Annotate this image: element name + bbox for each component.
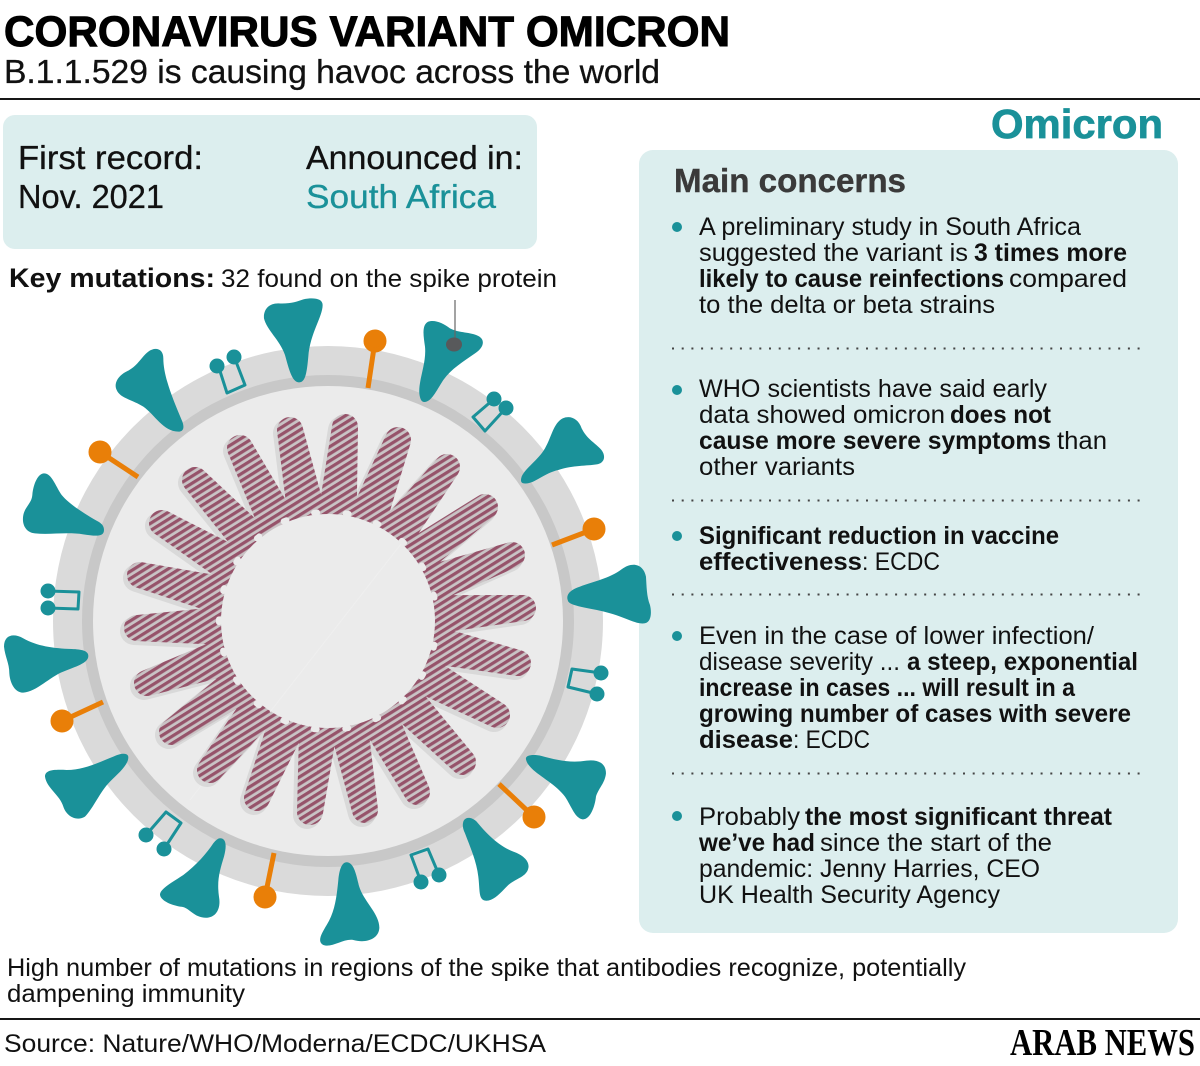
main concerns heading: Main concerns [674,162,906,199]
concern: exponential increase: : ECDC [793,726,870,754]
caption: High number of mutations in regions of the spike that antibodies recognize, potentially [7,954,967,982]
first record: First record: [18,139,203,176]
spike proteins [4,298,651,946]
subtitle: B.1.1.529 is causing havoc across the world [4,53,660,90]
source: Source: Nature/WHO/Moderna/ECDC/UKHSA [4,1030,546,1058]
central cavity [219,512,437,730]
mutation pointer [446,300,462,352]
key mutations heading: 32 found on the spike protein [221,265,557,293]
concern: significant threat: UK Health Security Agency [699,881,1000,909]
concern: reinfections: 3 times more [974,239,1127,267]
concern: vaccine effectiveness: Significant reduction in vaccine [699,522,1059,550]
concern: exponential increase: Even in the case of lower infection/ [699,622,1094,650]
concern: vaccine effectiveness [672,522,1059,576]
concern: exponential increase: growing number of cases with severe [699,700,1131,728]
concern: reinfections: likely to cause reinfections [699,265,1004,293]
concern: significant threat: pandemic: Jenny Harries, CEO [699,855,1040,883]
caption: dampening immunity [7,980,246,1008]
concern: exponential increase: increase in cases ... will result in a [699,674,1076,702]
concern: exponential increase: disease severity ... [699,648,900,676]
concern: significant threat: we’ve had [698,829,815,857]
teal membrane proteins [40,350,608,890]
concern: exponential increase [672,622,1138,754]
concern: severity: than [1057,427,1107,455]
concern: exponential increase: a steep, exponential [907,648,1138,676]
key mutations heading [9,263,557,293]
announced location: Announced in: [306,139,523,176]
announced location [306,139,523,215]
panel: first record and location [3,115,537,249]
concern: severity: does not [950,401,1052,429]
concern: significant threat: the most significant threat [805,803,1113,831]
first record [18,139,203,215]
announced location: South Africa [306,178,497,215]
concern: severity: data showed omicron [699,401,945,429]
concern: vaccine effectiveness: effectiveness [699,548,862,576]
orange envelope proteins [53,332,603,906]
caption [7,954,967,1008]
first record: Nov. 2021 [18,178,164,215]
concern: severity: WHO scientists have said early [699,375,1047,403]
key mutations heading: Key mutations: [9,263,215,293]
concern: severity: cause more severe symptoms [699,427,1051,455]
concern: reinfections: suggested the variant is [699,239,968,267]
title: CORONAVIRUS VARIANT OMICRON [4,8,730,56]
concern: reinfections: to the delta or beta strains [699,291,995,319]
concern: significant threat: Probably [699,803,801,831]
concern: vaccine effectiveness: : ECDC [862,548,940,576]
virus body [53,346,603,896]
concern: significant threat: since the start of the [820,829,1052,857]
concern: reinfections: A preliminary study in South Africa [699,213,1081,241]
RNA strand [134,427,523,815]
concern: reinfections: compared [1009,265,1127,293]
panel: main concerns [639,150,1178,933]
concern: significant threat [672,803,1113,909]
virus diagram [4,298,651,946]
concern: severity [672,375,1107,481]
concern: reinfections [672,213,1127,319]
concern: exponential increase: disease [699,726,793,754]
omicron heading: Omicron [991,101,1163,147]
concern: severity: other variants [699,453,855,481]
